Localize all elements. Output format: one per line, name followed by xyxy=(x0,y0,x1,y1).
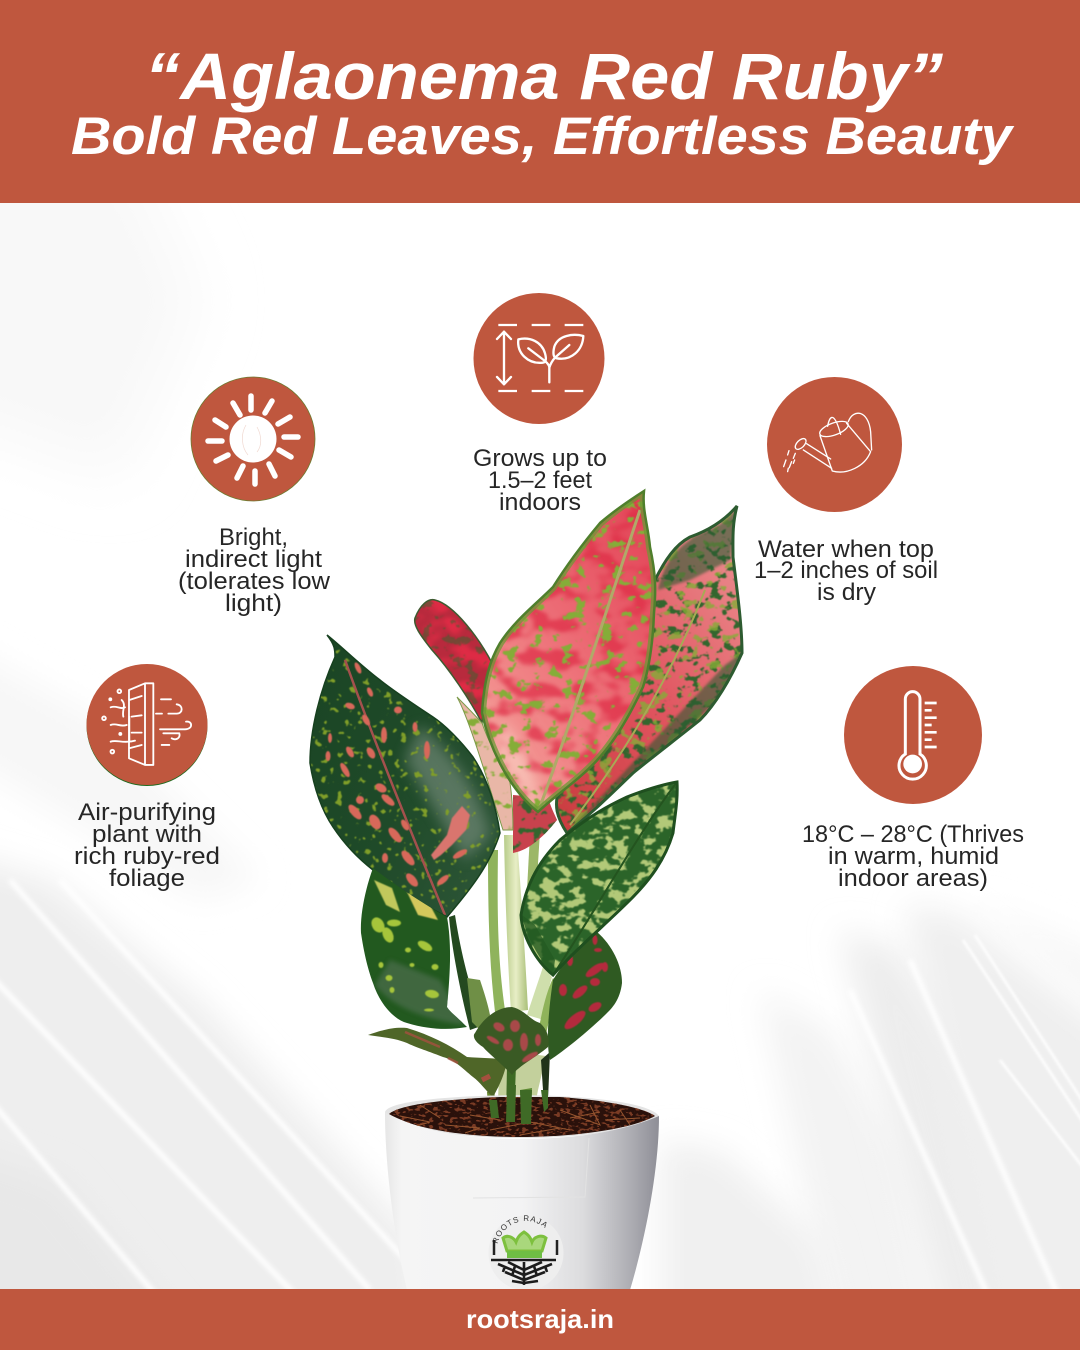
feature: air purifying xyxy=(74,664,220,892)
subtitle: Bold Red Leaves, Effortless Beauty xyxy=(71,107,1015,166)
feature: temperature xyxy=(802,666,1024,892)
text: grows up to: 1.5–2 feet xyxy=(488,467,592,494)
text: air purifying plant: plant with xyxy=(92,821,202,848)
text: air purifying plant: rich ruby-red xyxy=(74,843,220,870)
icon: watering can xyxy=(767,377,902,512)
pot body xyxy=(385,1112,659,1290)
pot xyxy=(385,1085,659,1289)
leaf: upper dark red xyxy=(414,598,491,724)
text: air purifying plant: foliage xyxy=(109,865,185,892)
text: bright light: Bright, xyxy=(219,524,288,551)
leaf: under red xyxy=(513,795,557,853)
pot logo sticker: ROOTS RAJA xyxy=(492,1215,546,1244)
text: temperature range: 18°C – 28°C (Thrives xyxy=(802,821,1024,848)
title: “Aglaonema Red Ruby” xyxy=(145,39,943,113)
plant xyxy=(305,490,750,1122)
text: grows up to: indoors xyxy=(499,489,581,516)
text: water when dry: 1–2 inches of soil xyxy=(754,557,938,584)
leaf: pale sliver xyxy=(456,696,514,830)
text: temperature range: in warm, humid xyxy=(828,843,999,870)
footer band xyxy=(0,1289,1080,1350)
pot rim and soil xyxy=(385,1095,660,1140)
leaf: green variegated xyxy=(515,780,685,980)
leaf: lower left green with yellow spots xyxy=(361,868,467,1029)
text: grows up to xyxy=(473,445,607,516)
footer website: rootsraja.in xyxy=(466,1304,614,1334)
icon: height sprout xyxy=(474,293,604,424)
text: temperature range xyxy=(802,821,1024,892)
text: water when dry xyxy=(754,536,938,606)
feature: watering xyxy=(754,377,938,606)
feature: plant height xyxy=(473,293,607,516)
leaf: lower right dark red xyxy=(548,932,622,1060)
text: water when dry: is dry xyxy=(817,579,877,606)
leaf: left dark speckled xyxy=(305,630,505,920)
leaf: small heart xyxy=(474,1007,549,1075)
feature: light xyxy=(178,377,330,617)
pot logo sticker xyxy=(491,1215,564,1285)
leaf: main red xyxy=(480,490,660,815)
stems xyxy=(449,815,560,1122)
header band xyxy=(0,0,1080,203)
text: bright light: indirect light xyxy=(185,546,322,573)
icon: sun xyxy=(191,377,315,501)
text: bright light: light) xyxy=(225,590,282,617)
text: bright light: (tolerates low xyxy=(178,568,330,595)
text: air purifying plant: Air-purifying xyxy=(78,799,216,826)
icon: air filter xyxy=(86,664,208,786)
text: grows up to: Grows up to xyxy=(473,445,607,472)
text: air purifying plant xyxy=(74,799,220,892)
background: white with soft silver streaks xyxy=(0,866,1080,1289)
leaf: right back red xyxy=(550,500,750,840)
leaf: drooping low xyxy=(368,1028,507,1097)
stem bases over soil xyxy=(489,1085,548,1124)
text: water when dry: Water when top xyxy=(758,536,934,563)
icon: thermometer xyxy=(844,666,982,804)
text: bright light xyxy=(178,524,330,617)
text: temperature range: indoor areas) xyxy=(838,865,988,892)
